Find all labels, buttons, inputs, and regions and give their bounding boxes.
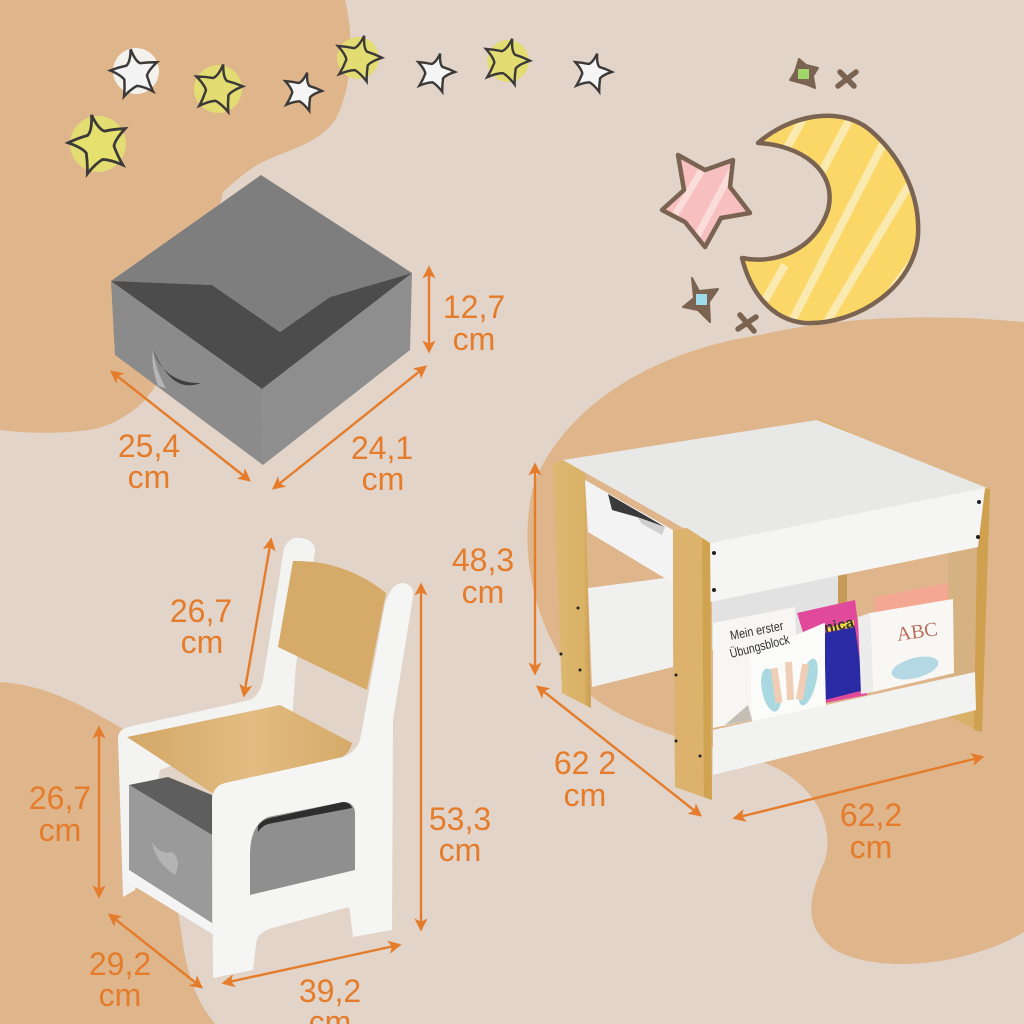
pink book behind: [875, 583, 948, 615]
chair seat: [127, 705, 352, 793]
icon: green sparkle: [790, 59, 818, 88]
arrow: table height: [534, 465, 536, 673]
table front leg: [673, 528, 712, 800]
label: table width: 62,2: [840, 797, 902, 833]
ABC illustration: [889, 652, 941, 684]
table back leg top: [817, 418, 850, 440]
table right leg: [948, 477, 990, 732]
table inner leg: [838, 572, 847, 607]
label: chair height: cm: [439, 832, 481, 868]
icon: blue sparkle: [683, 278, 718, 322]
label: box width: cm: [362, 461, 404, 497]
fabric storage box: [111, 175, 412, 465]
book title fragment: nica: [823, 614, 856, 637]
arrow: chair depth: [110, 915, 201, 987]
icon: crescent moon: [742, 110, 925, 325]
arrow: chair width: [224, 945, 399, 983]
star 2 white: [107, 45, 162, 98]
label: seat height: 26,7: [29, 780, 91, 816]
chair backrest: [278, 561, 386, 690]
chair window with drawer side: [250, 802, 355, 895]
chair: [118, 538, 413, 978]
arrow: box width: [274, 367, 425, 488]
label: table width: cm: [850, 829, 892, 865]
star 3 yellow: [191, 60, 246, 114]
icon: pink star: [662, 155, 750, 247]
table front apron: [710, 488, 985, 602]
chair far side frame: [118, 538, 315, 897]
title text: [728, 618, 791, 661]
label: box width: 24,1: [351, 430, 413, 466]
box left side: [111, 281, 263, 465]
book shelf front panel: [713, 672, 976, 775]
box right side: [262, 273, 412, 465]
label: table height: 48,3: [452, 542, 514, 578]
workbook back: [713, 607, 797, 728]
icon: small cross bottom: [738, 315, 756, 331]
drawer top face: [129, 777, 212, 835]
title text: Übungsblock: [728, 632, 791, 661]
table top surface: [563, 420, 987, 543]
chair near side frame: [212, 583, 413, 978]
label: chair depth: cm: [99, 977, 141, 1013]
box dark interior: [111, 273, 412, 389]
drawer grip: [608, 494, 665, 535]
box handle: [152, 350, 201, 388]
label: seat height: cm: [39, 812, 81, 848]
arrow: seat height: [98, 728, 100, 896]
star 4 white: [279, 68, 326, 113]
table apron screws: [712, 500, 981, 592]
star 6 white: [412, 49, 459, 94]
label: table height: cm: [462, 574, 504, 610]
arrow: box depth: [112, 372, 249, 480]
label: backrest height: 26,7: [170, 593, 232, 629]
title text: Mein erster: [729, 618, 785, 643]
arrow: table width: [735, 757, 982, 818]
chair window shadow: [258, 802, 352, 832]
chair drawer: [124, 777, 214, 935]
table with book shelf: [553, 418, 990, 800]
label: box height: 12,7: [443, 289, 505, 325]
box inner walls: [111, 175, 412, 332]
drawer handle: [152, 842, 178, 875]
label: backrest height: cm: [181, 624, 223, 660]
label: chair width: 39,2: [299, 973, 361, 1009]
label: box depth: 25,4: [118, 428, 180, 464]
white sheet between books: [858, 613, 873, 694]
label: chair depth: 29,2: [89, 946, 151, 982]
ABC title: ABC: [895, 618, 939, 646]
star 5 yellow: [331, 30, 386, 84]
books: [713, 583, 954, 728]
table inner wall behind books: [712, 572, 838, 650]
star 1 yellow large: [63, 108, 134, 176]
label: table depth: cm: [564, 777, 606, 813]
workbook front with title: [728, 618, 826, 722]
drawer front face: [129, 785, 212, 923]
star 7 yellow: [479, 33, 534, 87]
label: table depth: 62 2: [554, 745, 616, 781]
dimension arrows: [99, 268, 982, 987]
star garland: [63, 30, 616, 176]
arrow: chair height: [420, 585, 422, 929]
background blob: right: [527, 317, 1024, 964]
workbook illustration: [725, 705, 752, 725]
illustration of hand: [758, 657, 822, 713]
arrow: table depth: [538, 687, 700, 815]
icon: small cross top: [838, 72, 856, 86]
table back panel: [588, 577, 673, 687]
arrow: backrest height: [244, 540, 271, 695]
label: box height: cm: [453, 321, 495, 357]
table left leg: [553, 460, 591, 708]
background blob: top left: [0, 0, 351, 433]
drawer bottom lip: [124, 870, 214, 935]
book with pink cover: [797, 600, 867, 703]
arrow: box height: [428, 268, 430, 351]
label: chair height: 53,3: [429, 801, 491, 837]
label: box depth: cm: [128, 459, 170, 495]
dimension labels: [29, 289, 902, 1024]
ABC book: [870, 599, 954, 692]
background blob: bottom left: [0, 682, 215, 1024]
star 8 white: [569, 49, 616, 94]
table left apron with drawer: [585, 480, 673, 583]
